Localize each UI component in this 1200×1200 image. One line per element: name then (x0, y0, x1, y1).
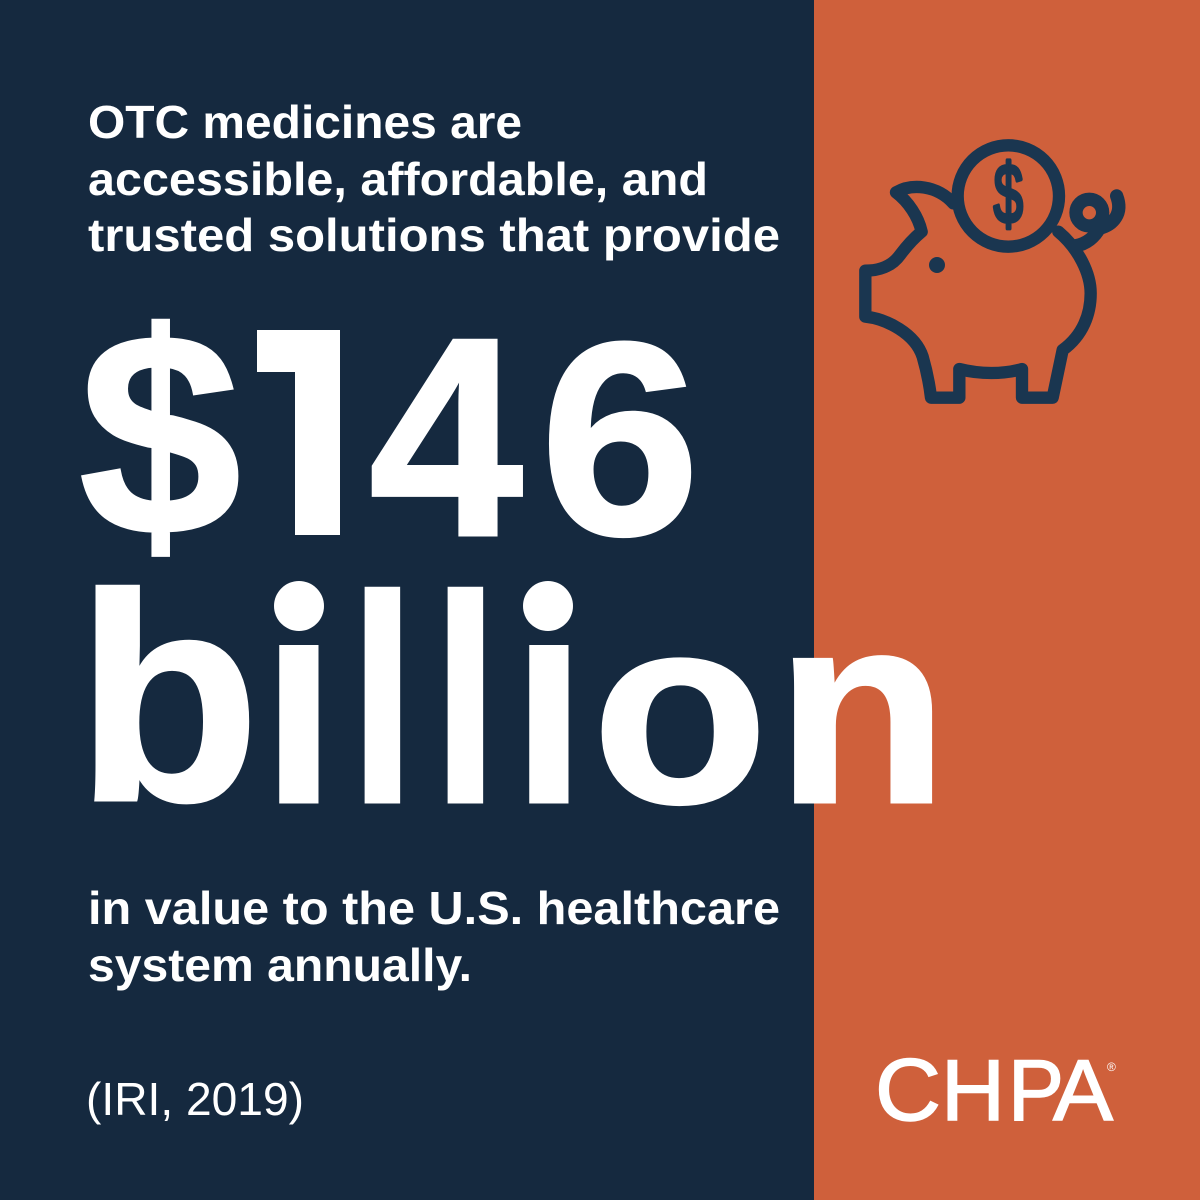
intro text: OTC medicines are (88, 96, 522, 148)
panel: navy background (0, 0, 814, 1200)
big word: billion: i (512, 535, 586, 865)
big word: billion: b (76, 533, 260, 863)
logo: CHPA: P (1008, 1043, 1064, 1139)
dollar sign: $ (994, 148, 1023, 241)
panel: orange sidebar (814, 0, 1200, 1200)
intro text: trusted solutions that provide (88, 209, 780, 261)
coin (958, 145, 1059, 247)
logo: CHPA: H (941, 1043, 1005, 1139)
pig eye (929, 257, 945, 273)
big word: billion: o (592, 562, 768, 859)
big word: billion (94, 581, 932, 806)
closing text: system annually. (88, 939, 472, 991)
icon: piggy bank with coin (865, 145, 1119, 398)
logo: CHPA: C (875, 1040, 941, 1139)
pig body (865, 187, 1091, 398)
logo: CHPA: A (1053, 1043, 1114, 1139)
big figure: $146: 6 (540, 286, 700, 593)
source citation: (IRI, 2019) (86, 1073, 304, 1125)
big figure: $146: $ (79, 274, 241, 596)
closing text: in value to the U.S. healthcare (88, 882, 780, 934)
big figure: $146: 1 (245, 268, 363, 598)
big figure: $146 (81, 318, 692, 557)
logo: CHPA: ® (1107, 1060, 1116, 1074)
intro text (88, 96, 780, 261)
big word: billion: l (432, 535, 499, 865)
big word: billion: n (776, 559, 948, 860)
big figure: $146: 4 (369, 279, 525, 595)
closing text (88, 882, 780, 991)
big word: billion: l (349, 535, 416, 865)
big word: billion: i (262, 535, 336, 865)
intro text: accessible, affordable, and (88, 153, 708, 205)
logo: CHPA (875, 1040, 1116, 1139)
pig tail (1075, 196, 1119, 246)
